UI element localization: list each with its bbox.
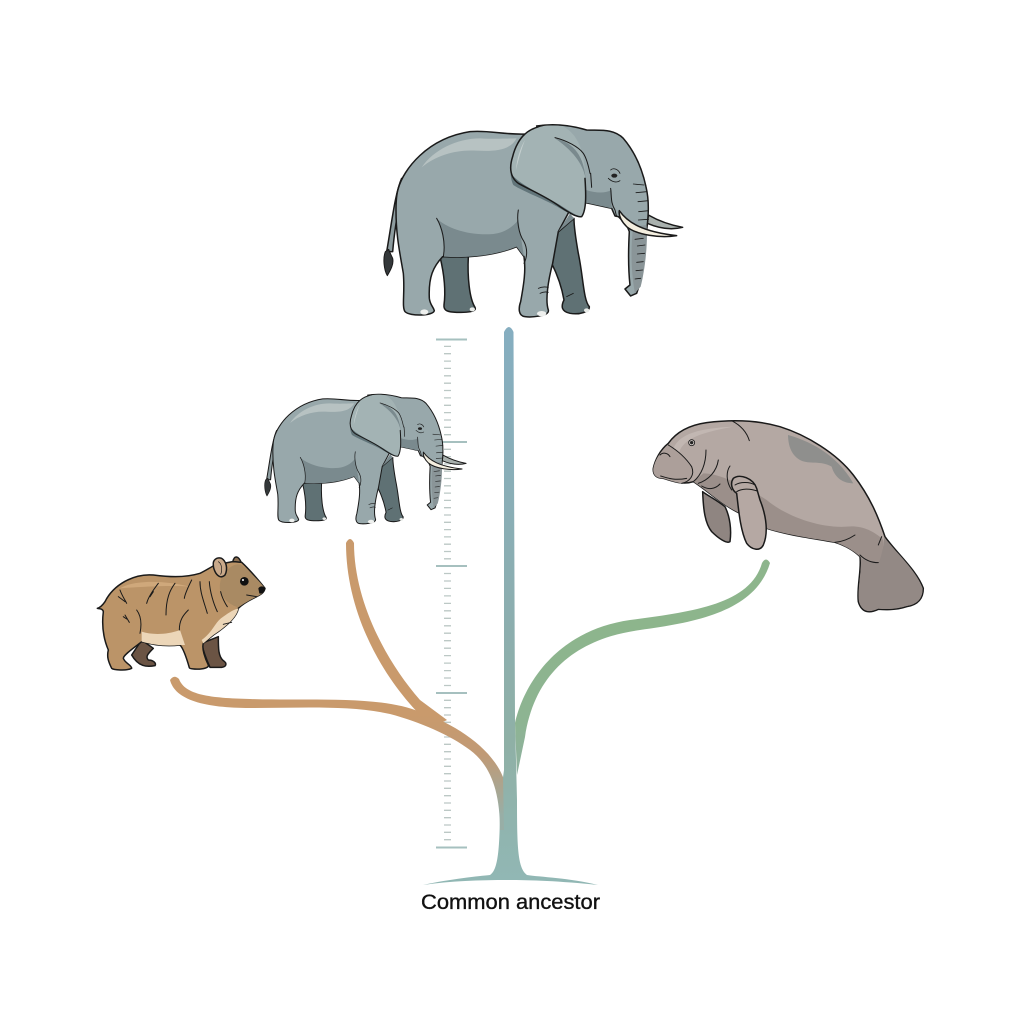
icon: hyrax xyxy=(97,557,265,670)
icon: small elephant xyxy=(265,394,466,524)
branch: orange to small elephant xyxy=(346,539,447,727)
branch: green to manatee xyxy=(515,560,770,775)
label: common ancestor: Common ancestor xyxy=(421,891,600,914)
height scale ruler xyxy=(436,340,467,848)
branch: orange to hyrax xyxy=(170,677,504,830)
phylogenetic tree xyxy=(170,327,770,885)
branch: central trunk to elephant xyxy=(423,327,598,885)
icon: large elephant xyxy=(384,125,683,317)
icon: manatee xyxy=(653,421,923,612)
